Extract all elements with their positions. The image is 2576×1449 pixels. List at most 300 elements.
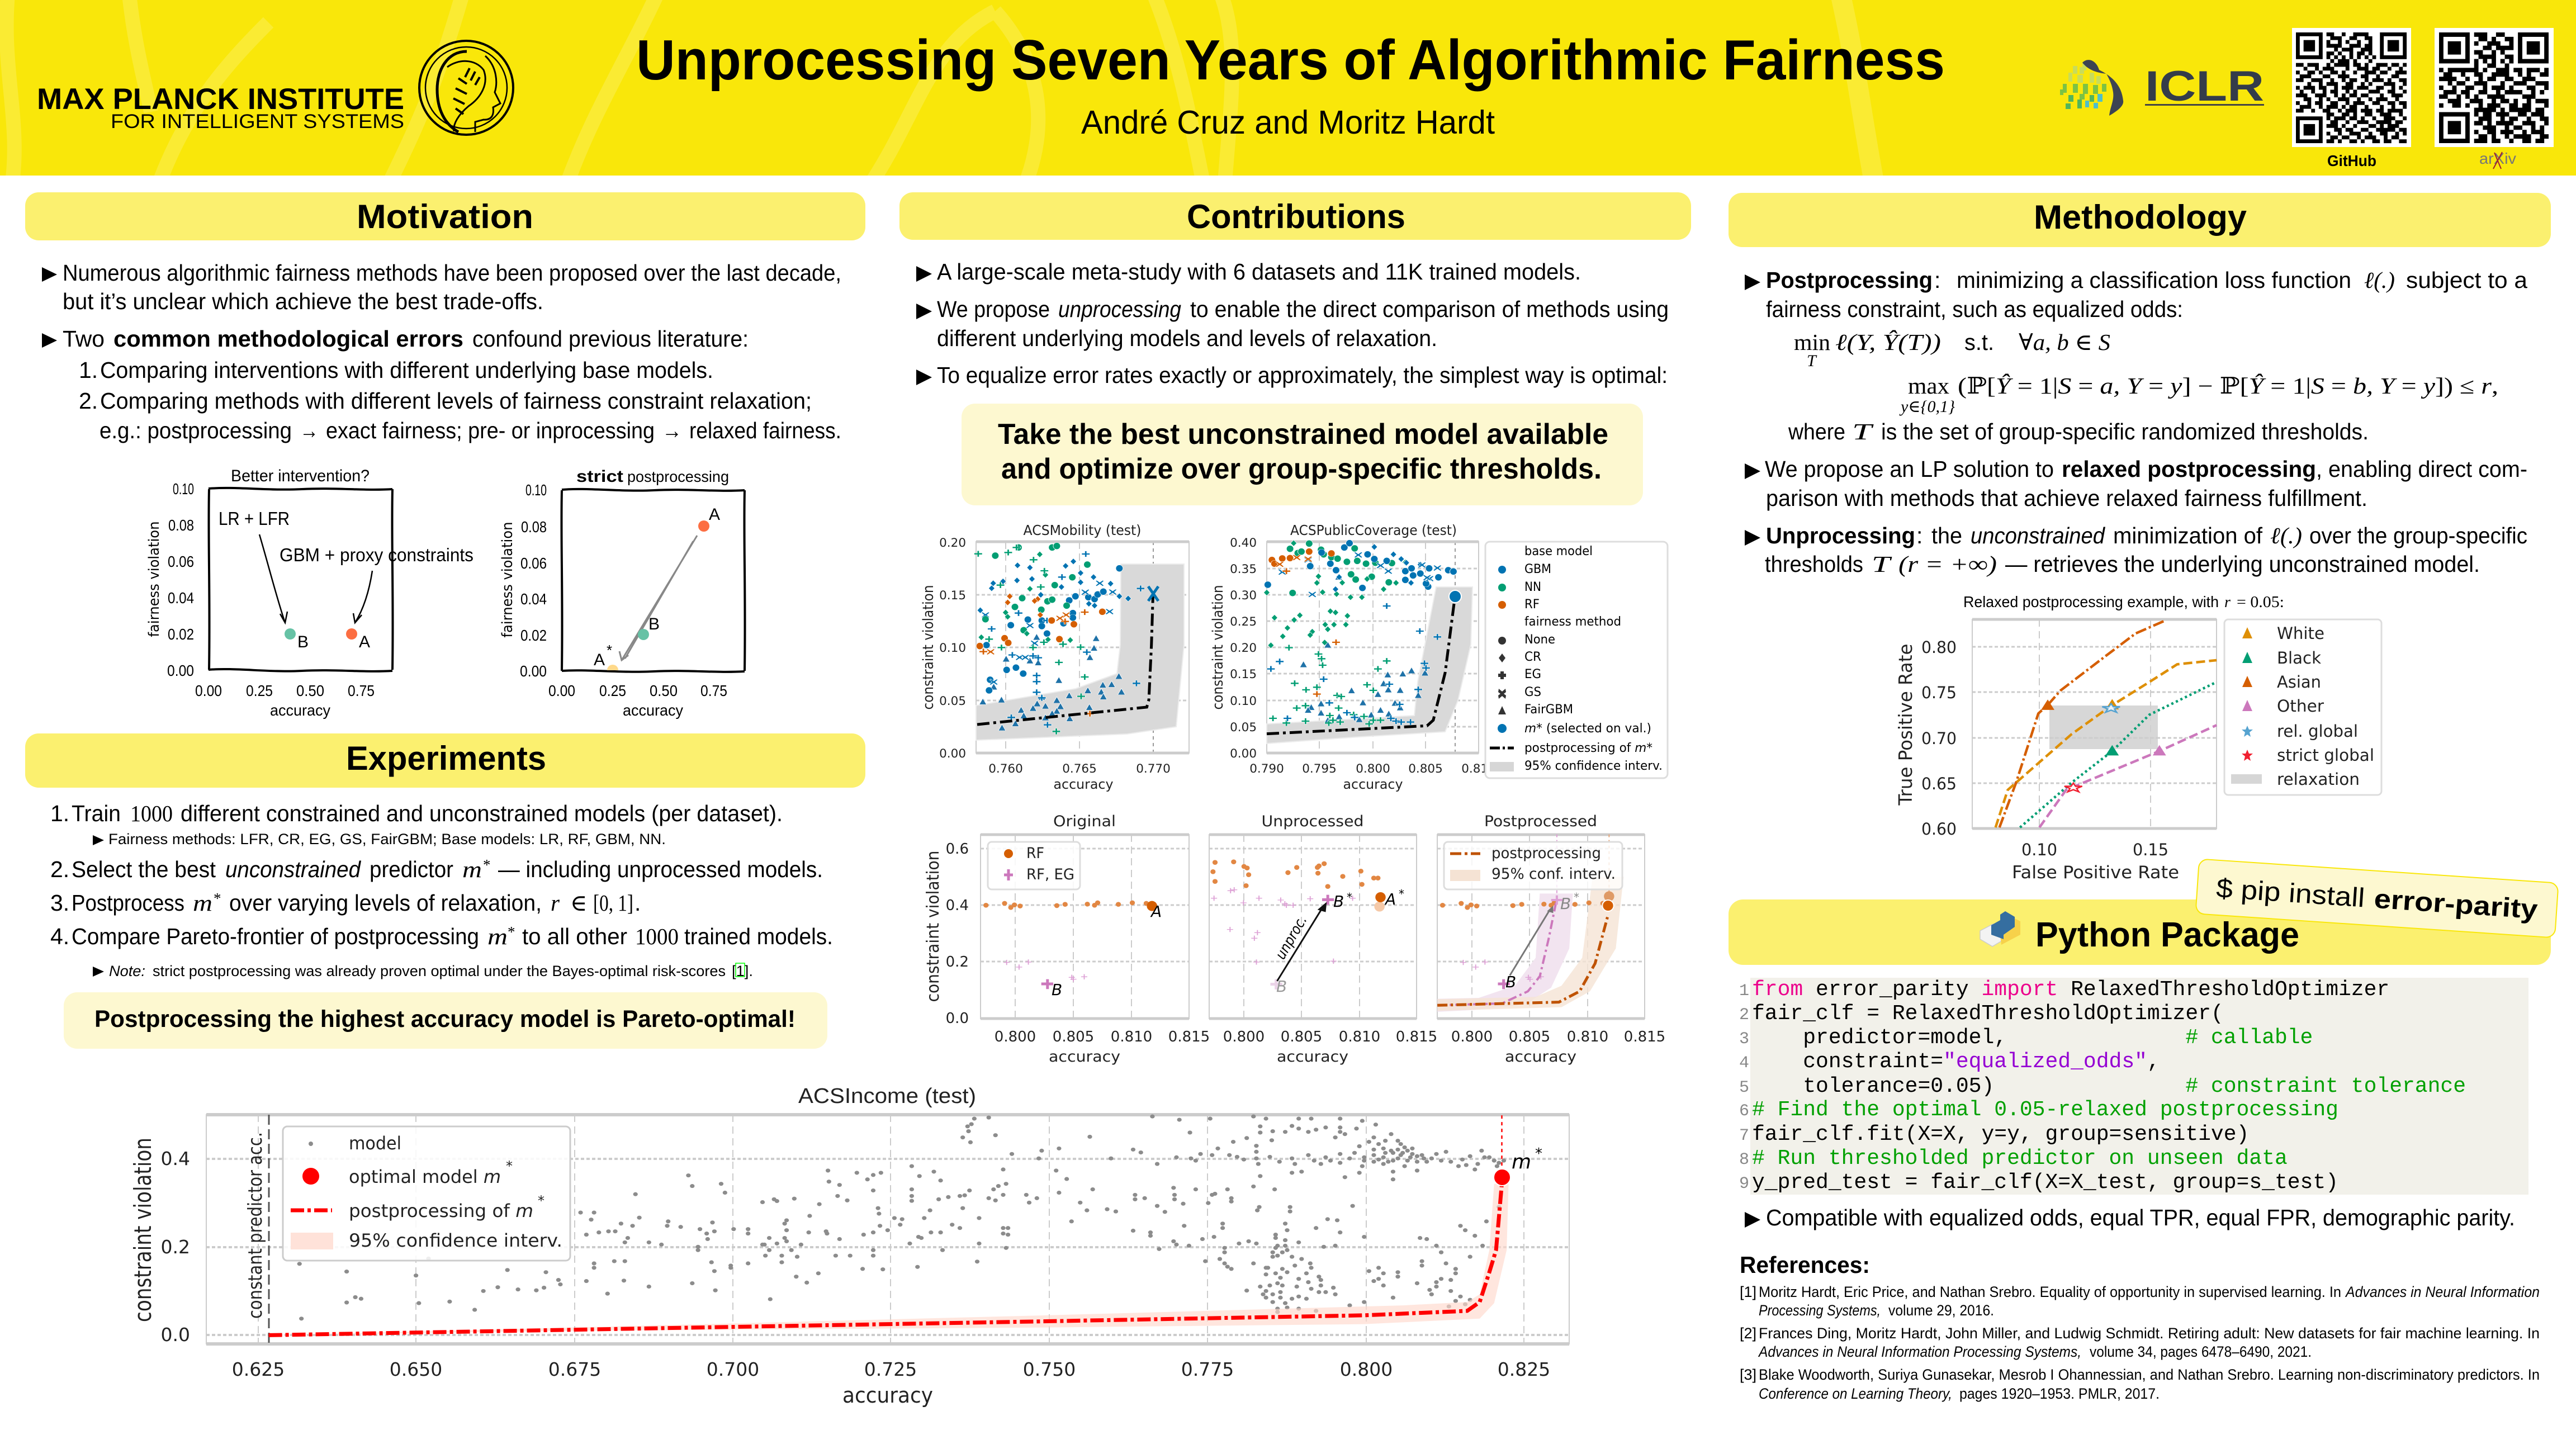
text: where T: where <box>1788 419 1845 444</box>
chart: better intervention sketch: 0.10 <box>173 480 194 498</box>
step 4: trained models. <box>684 924 833 949</box>
chart: ACSMobility: 0.05 <box>939 694 966 708</box>
bullet: unprocessing: (r = +∞) <box>1898 551 1997 577</box>
callout: Pareto-optimal: Postprocessing the highest accuracy model is Pareto-optimal! <box>94 1006 795 1033</box>
step 1: different constrained and unconstrained models (per dataset). <box>181 801 783 826</box>
step 2: * <box>483 856 491 873</box>
reference 2: volume 34, pages 6478–6490, 2021. <box>2090 1343 2312 1360</box>
chart: strict postprocessing sketch: B <box>648 615 660 633</box>
legend: groups: relaxation <box>2277 770 2360 789</box>
chart: ROC relaxed postprocessing: 0.80 <box>1921 638 1957 657</box>
legend: models and fairness methods: FairGBM <box>1524 703 1573 717</box>
chart: ACSMobility: 0.760 <box>988 762 1023 776</box>
chart: Postprocessed: * <box>1574 891 1579 904</box>
legend: ACSIncome: * <box>538 1193 544 1209</box>
chart: ACSIncome: 0.0 <box>161 1324 190 1346</box>
step 2: m <box>462 856 482 882</box>
chart: ACSMobility: constraint violation <box>920 585 937 710</box>
bullet: unprocessing: to enable the direct comparison of methods using <box>1190 296 1669 322</box>
chart: Unprocessed: unproc. <box>1272 913 1311 963</box>
sub-note: methods and base models: Fairness methods: LFR, CR, EG, GS, FairGBM; Base models: LR, RF, GBM, NN. <box>108 831 666 847</box>
chart: ACSMobility: 0.15 <box>939 589 966 603</box>
bullet: unprocessing: : <box>1916 523 1922 548</box>
chart: Original: A <box>1150 902 1162 921</box>
chart: better intervention sketch: 0.50 <box>296 682 324 699</box>
legend: groups: rel. global <box>2277 722 2358 741</box>
chart: ACSIncome: 0.2 <box>161 1236 190 1258</box>
legend: postprocessing: 95% conf. interv. <box>1491 865 1616 883</box>
step 4: to all other <box>522 924 627 949</box>
heading: Experiments <box>25 733 865 788</box>
chart: ACSIncome: 0.750 <box>1023 1358 1076 1380</box>
bullet: compatibility: Compatible with equalized odds, equal TPR, equal FPR, demographic parity. <box>1766 1205 2515 1230</box>
icon: Minerva seal <box>419 41 513 135</box>
step 3: ∈ <box>570 890 587 916</box>
legend: models and fairness methods: fairness method <box>1524 615 1621 629</box>
bullet: methodological errors: common methodological errors <box>113 326 463 352</box>
bullet: relaxed postprocessing: parison with methods that achieve relaxed fairness fulfillment. <box>1766 485 2367 511</box>
step 2: — including unprocessed models. <box>498 856 823 882</box>
chart: ACSMobility: 0.765 <box>1062 762 1097 776</box>
heading: Methodology: Methodology <box>2034 198 2247 236</box>
bullet: unprocessing: Unprocessing <box>1766 523 1915 548</box>
chart: ACSPublicCoverage: 0.40 <box>1230 536 1257 550</box>
chart: strict postprocessing sketch: 0.10 <box>525 481 547 499</box>
code block <box>1739 978 2528 1195</box>
legend: RF markers: RF <box>1026 845 1044 862</box>
step 3: 3. <box>50 890 69 916</box>
chart: ACSPublicCoverage: 0.05 <box>1230 721 1257 735</box>
chart: better intervention sketch: 0.00 <box>167 662 194 679</box>
chart: ACSPublicCoverage: 0.35 <box>1230 562 1257 576</box>
chart: Original: 0.800 <box>995 1029 1036 1045</box>
step 3: over varying levels of relaxation, <box>229 890 542 916</box>
chart: better intervention sketch: 0.25 <box>246 682 273 699</box>
bullet: numerous methods: Numerous algorithmic fairness methods have been proposed over the last decade, <box>63 260 841 286</box>
bullet: numerous methods: but it’s unclear which achieve the best trade-offs. <box>63 288 543 314</box>
chart: ACSMobility: accuracy <box>1053 776 1114 792</box>
bullet: methodological errors: → <box>300 418 319 443</box>
code block: fair_clf = RelaxedThresholdOptimizer( <box>1752 1002 2224 1026</box>
QR code: arXiv <box>2435 28 2554 169</box>
chart: ACSPublicCoverage: 0.795 <box>1302 762 1337 776</box>
legend: groups: Other <box>2277 697 2324 716</box>
chart: Original: 0.810 <box>1111 1029 1152 1045</box>
equation: constrained minimization: T <box>1807 352 1817 370</box>
chart: strict postprocessing sketch: 0.04 <box>520 590 547 608</box>
legend: ACSIncome: 95% confidence interv. <box>349 1230 562 1251</box>
reference 2: Advances in Neural Information Processing Systems, <box>1758 1343 2081 1360</box>
chart: Postprocessed: 0.800 <box>1451 1029 1493 1045</box>
legend: groups <box>2224 619 2381 795</box>
chart: Unprocessed: Unprocessed <box>1261 813 1364 830</box>
heading: Motivation: Motivation <box>357 198 533 235</box>
legend: models and fairness methods: GS <box>1524 685 1541 699</box>
equation: constrained minimization: max <box>1908 373 1949 399</box>
chart: Original: 0.6 <box>946 841 969 858</box>
step 2: 2. <box>50 856 69 882</box>
chart: strict postprocessing sketch: 0.00 <box>520 662 547 680</box>
chart: ACSPublicCoverage <box>1210 522 1496 792</box>
code block: 2 <box>1739 1006 1749 1025</box>
legend: ACSIncome: * <box>506 1158 513 1174</box>
bullet: methodological errors: Comparing methods with different levels of fairness constraint relaxation; <box>100 388 812 414</box>
chart: better intervention sketch: accuracy <box>270 702 330 719</box>
bullet: unprocessing: T <box>1872 551 1893 577</box>
step 3: . <box>634 890 641 916</box>
chart: strict postprocessing sketch: strict <box>576 467 623 486</box>
chart: Unprocessed: accuracy <box>1277 1048 1348 1066</box>
bullet: postprocessing: ℓ(.) <box>2364 267 2395 293</box>
code block: 4 <box>1739 1054 1749 1073</box>
chart: Postprocessed: 0.805 <box>1509 1029 1550 1045</box>
bullet: methodological errors: Two <box>63 326 105 352</box>
chart: strict postprocessing sketch: 0.08 <box>521 518 547 536</box>
chart: ROC relaxed postprocessing <box>1895 619 2381 883</box>
bullet: unprocessing: different underlying models and levels of relaxation. <box>937 325 1437 351</box>
chart: better intervention sketch: LR + LFR <box>219 508 290 529</box>
chart: ACSIncome: 0.4 <box>161 1148 190 1169</box>
chart: ACSIncome: 0.725 <box>864 1358 917 1380</box>
caption: relaxed example: Relaxed postprocessing example, with <box>1963 593 2219 610</box>
bullet: methodological errors: → <box>662 418 682 443</box>
code block: predictor=model, # callable <box>1752 1026 2313 1050</box>
reference 1 <box>1740 1284 2540 1319</box>
chart: strict postprocessing sketch: accuracy <box>623 702 683 719</box>
chart: Postprocessed: Postprocessed <box>1484 813 1597 830</box>
step 3: r <box>551 890 560 916</box>
bullet: equalize error rates: To equalize error rates exactly or approximately, the simplest way is optimal: <box>937 362 1668 388</box>
chart: Unprocessed: 0.810 <box>1339 1029 1380 1045</box>
equation: constrained minimization: ℓ(Y, Ŷ(T)) <box>1835 329 1941 355</box>
bullet: unprocessing: We propose <box>937 296 1050 322</box>
step 1: Train <box>72 801 121 826</box>
reference 1: [1] <box>1740 1284 1756 1300</box>
chart: ACSIncome: 0.650 <box>390 1358 442 1380</box>
callout: best unconstrained model <box>962 404 1643 505</box>
chart: better intervention sketch: 0.08 <box>168 517 194 534</box>
chart: ROC relaxed postprocessing: False Positive Rate <box>2012 863 2179 883</box>
legend: models and fairness methods: None <box>1524 633 1555 647</box>
chart: Postprocessed: B <box>1560 894 1571 913</box>
chart: Original: 0.805 <box>1053 1029 1094 1045</box>
chart: strict postprocessing sketch: A <box>709 505 720 524</box>
chart: ACSPublicCoverage: 0.800 <box>1356 762 1390 776</box>
chart: ROC relaxed postprocessing: 0.10 <box>2021 840 2057 859</box>
legend: postprocessing: postprocessing <box>1491 845 1601 862</box>
chart: strict postprocessing sketch: 0.06 <box>520 555 547 572</box>
step 4: Compare Pareto-frontier of postprocessing <box>72 924 479 949</box>
chart: Postprocessed <box>1437 813 1665 1066</box>
chart: strict postprocessing sketch: 0.02 <box>520 627 547 644</box>
chart: better intervention sketch: 0.02 <box>168 626 194 643</box>
icon: python logo <box>1980 911 2020 946</box>
chart: Original: accuracy <box>1049 1048 1120 1066</box>
sub-note: strict postprocessing: Note: <box>109 963 145 979</box>
chart: ACSIncome: 0.675 <box>548 1358 601 1380</box>
chart: ROC relaxed postprocessing: True Positive Rate <box>1895 644 1916 806</box>
legend: models and fairness methods: 95% confidence interv. <box>1524 759 1663 773</box>
chart: ACSMobility: 0.00 <box>939 747 966 761</box>
chart: better intervention sketch: GBM + proxy constraints <box>280 544 473 565</box>
legend: ACSIncome: model <box>349 1133 401 1154</box>
legend: ACSIncome: optimal model m <box>349 1166 501 1187</box>
step 2: unconstrained <box>225 856 361 882</box>
panel: Motivation <box>25 192 865 719</box>
chart: strict postprocessing sketch: 0.50 <box>650 682 678 699</box>
bullet: postprocessing: Postprocessing <box>1766 267 1933 293</box>
reference 3: Blake Woodworth, Suriya Gunasekar, Mesrob I Ohannessian, and Nathan Srebro. Learning non-discriminatory predictors. In <box>1759 1366 2540 1383</box>
reference 2: [2] <box>1740 1325 1756 1342</box>
legend: models and fairness methods: RF <box>1524 598 1540 612</box>
chart: ACSIncome: 0.775 <box>1181 1358 1234 1380</box>
bullet: unprocessing: — retrieves the underlying unconstrained model. <box>2005 551 2480 577</box>
chart: strict postprocessing sketch: 0.00 <box>548 682 575 699</box>
heading: Python Package: Python Package <box>2035 916 2299 954</box>
bullet: meta-study: A large-scale meta-study with 6 datasets and 11K trained models. <box>937 259 1581 285</box>
heading: Python Package <box>1729 899 2551 965</box>
QR code: arXiv: arXiv <box>2479 150 2516 167</box>
chart: better intervention sketch: Better intervention? <box>231 467 370 485</box>
chart: ACSMobility: 0.20 <box>939 536 966 550</box>
chart: better intervention sketch: 0.75 <box>348 682 375 699</box>
chart: ACSMobility: 0.10 <box>939 641 966 655</box>
bullet: methodological errors: e.g.: postprocessing <box>100 418 292 443</box>
chart: ACSIncome: 0.825 <box>1498 1358 1550 1380</box>
callout: best unconstrained model: Take the best unconstrained model available <box>998 418 1608 451</box>
bullet: unprocessing: thresholds <box>1765 551 1863 577</box>
legend: models and fairness methods: base model <box>1524 544 1593 558</box>
equation: constrained minimization <box>1794 329 2498 416</box>
bullet: relaxed postprocessing: We propose an LP solution to <box>1765 456 2054 482</box>
step 2: Select the best <box>72 856 216 882</box>
legend: groups: Asian <box>2277 673 2321 692</box>
code block: # Run thresholded predictor on unseen data <box>1752 1147 2288 1171</box>
chart: ROC relaxed postprocessing: 0.15 <box>2133 840 2168 859</box>
legend: models and fairness methods: EG <box>1524 667 1541 681</box>
QR code: GitHub: GitHub <box>2327 152 2376 169</box>
bullet: postprocessing: minimizing a classification loss function <box>1957 267 2351 293</box>
chart: Unprocessed: * <box>1399 887 1404 901</box>
code block: 9 <box>1739 1175 1749 1194</box>
bullet: methodological errors <box>42 326 841 443</box>
callout: best unconstrained model: and optimize over group-specific thresholds. <box>1001 453 1602 485</box>
chart: Unprocessed: A <box>1384 890 1396 908</box>
chart: ACSPublicCoverage: 0.25 <box>1230 615 1257 629</box>
chart: ACSIncome: 0.625 <box>232 1358 285 1380</box>
chart: Postprocessed: accuracy <box>1505 1048 1576 1066</box>
bullet: relaxed postprocessing: relaxed postprocessing <box>2062 456 2316 482</box>
legend: RF markers: RF, EG <box>1026 866 1074 883</box>
chart: ROC relaxed postprocessing: 0.75 <box>1921 683 1957 702</box>
step 4: m <box>487 924 508 949</box>
chart: ACSMobility: 0.770 <box>1136 762 1171 776</box>
chart: ACSIncome: accuracy <box>842 1383 933 1408</box>
panel: Contributions <box>899 192 1691 1066</box>
code block: # Find the optimal 0.05-relaxed postprocessing <box>1752 1098 2338 1122</box>
chart: strict postprocessing sketch: postprocessing <box>627 468 729 485</box>
bullet: relaxed postprocessing: , enabling direct com- <box>2316 456 2527 482</box>
bullet: methodological errors: exact fairness; pre- or inprocessing <box>326 418 655 443</box>
logo: Max Planck Institute: FOR INTELLIGENT SYSTEMS <box>111 111 404 132</box>
chart: ACSMobility <box>920 522 1189 792</box>
step 3 <box>50 890 641 916</box>
logo: ICLR <box>2060 60 2264 116</box>
bullet: unprocessing <box>1745 523 2527 577</box>
legend: models and fairness methods: postprocessing of m* <box>1524 741 1652 755</box>
heading: Contributions: Contributions <box>1187 198 1405 235</box>
code block: 7 <box>1739 1126 1749 1145</box>
legend: models and fairness methods: GBM <box>1524 562 1551 576</box>
chart: Original: 0.4 <box>946 897 969 914</box>
bullet: methodological errors: relaxed fairness. <box>689 418 841 443</box>
logo: Max Planck Institute: MAX PLANCK INSTITUTE <box>37 83 404 116</box>
step 4: * <box>508 924 515 940</box>
chart: strict postprocessing sketch: A <box>594 651 605 669</box>
bullet: unprocessing: the <box>1931 523 1962 548</box>
heading: Methodology <box>1729 193 2551 247</box>
chart: ACSPublicCoverage: ACSPublicCoverage (test) <box>1290 522 1457 538</box>
code block: 8 <box>1739 1150 1749 1169</box>
chart: strict postprocessing sketch: 0.75 <box>700 682 727 699</box>
bullet: methodological errors: 1. <box>79 357 98 383</box>
chart: ACSPublicCoverage: constraint violation <box>1210 585 1227 710</box>
step 3: Postprocess <box>72 890 184 916</box>
code block: y_pred_test = fair_clf(X=X_test, group=s_test) <box>1752 1171 2338 1195</box>
QR code: GitHub <box>2292 28 2411 169</box>
chart: ACSPublicCoverage: 0.00 <box>1230 747 1257 761</box>
chart: ACSIncome: ACSIncome (test) <box>798 1085 976 1108</box>
references <box>1740 1252 2540 1402</box>
legend: RF markers <box>988 842 1080 889</box>
step 2 <box>50 856 823 882</box>
bullet: methodological errors: confound previous literature: <box>472 326 749 352</box>
panel: Python Package <box>1729 859 2559 1230</box>
equation: constrained minimization: min <box>1794 329 1830 355</box>
reference 1: Moritz Hardt, Eric Price, and Nathan Srebro. Equality of opportunity in supervised learning. In <box>1759 1284 2341 1300</box>
reference 1: Processing Systems, <box>1759 1302 1881 1319</box>
chart: ACSMobility: ACSMobility (test) <box>1023 522 1142 538</box>
chart: strict postprocessing sketch: * <box>607 642 612 659</box>
panel: Methodology <box>1729 193 2551 883</box>
callout: pip install <box>2195 859 2559 938</box>
equation: constrained minimization: (ℙ[Ŷ = 1| S = a, Y = y] − ℙ[ Ŷ = 1| S = b, Y = y]) ≤ r, <box>1958 373 2498 399</box>
legend: models and fairness methods: m* (selected on val.) <box>1524 722 1651 736</box>
code block: constraint="equalized_odds", <box>1752 1050 2160 1074</box>
step 2: predictor <box>370 856 453 882</box>
chart: ACSPublicCoverage: accuracy <box>1343 776 1403 792</box>
reference 3: Conference on Learning Theory, <box>1759 1385 1952 1402</box>
equation: constrained minimization: s.t. <box>1964 329 1994 355</box>
step 3: [0, 1] <box>593 890 633 916</box>
step 1: 1. <box>50 801 69 826</box>
bullet: postprocessing <box>1745 267 2527 322</box>
chart: better intervention sketch: B <box>297 633 309 651</box>
legend: groups: strict global <box>2277 746 2374 765</box>
chart: ACSIncome: constant predictor acc. <box>244 1132 267 1319</box>
chart: Unprocessed: 0.805 <box>1281 1029 1322 1045</box>
step 3: m <box>193 890 212 916</box>
chart: better intervention sketch: 0.06 <box>168 553 194 570</box>
chart: strict postprocessing sketch: 0.25 <box>599 682 626 699</box>
legend: models and fairness methods: NN <box>1524 580 1541 594</box>
bullet: unprocessing: minimization of <box>2113 523 2263 548</box>
bullet: numerous methods <box>42 260 841 314</box>
text: where T: T <box>1852 419 1874 444</box>
callout: Pareto-optimal <box>64 992 827 1049</box>
chart: ACSPublicCoverage: 0.15 <box>1230 667 1257 681</box>
bullet: unprocessing: ℓ(.) <box>2270 523 2302 548</box>
chart: ACSPublicCoverage: 0.10 <box>1230 694 1257 708</box>
chart: Postprocessed: 0.815 <box>1624 1029 1665 1045</box>
code block: 5 <box>1739 1078 1749 1097</box>
chart: Original: 0.815 <box>1168 1029 1210 1045</box>
chart: ACSIncome: * <box>1535 1145 1542 1162</box>
callout: pip install: $ pip install <box>2215 874 2366 913</box>
caption: relaxed example: r <box>2224 594 2231 611</box>
code block: fair_clf.fit(X=X, y=y, group=sensitive) <box>1752 1123 2249 1147</box>
logo: ICLR: ICLR <box>2145 63 2264 110</box>
logo: Max Planck Institute <box>37 41 513 135</box>
chart: Unprocessed: * <box>1347 891 1352 904</box>
reference 1: volume 29, 2016. <box>1888 1302 1994 1319</box>
chart: ACSPublicCoverage: 0.30 <box>1230 589 1257 603</box>
chart: Unprocessed: 0.815 <box>1396 1029 1437 1045</box>
reference 2: Frances Ding, Moritz Hardt, John Miller, and Ludwig Schmidt. Retiring adult: New datasets for fair machine learning. In <box>1759 1325 2540 1342</box>
chart: better intervention sketch: A <box>359 633 370 651</box>
chart: strict postprocessing sketch: fairness violation <box>499 522 516 637</box>
chart: ACSPublicCoverage: 0.20 <box>1230 641 1257 655</box>
bullet: unprocessing: unconstrained <box>1971 523 2105 548</box>
icon: ICLR silhouette <box>2082 60 2123 116</box>
heading: Motivation <box>25 192 865 240</box>
legend: models and fairness methods: CR <box>1524 650 1541 664</box>
chart: ACSIncome <box>129 1085 1569 1408</box>
code block: from error_parity import RelaxedThresholdOptimizer <box>1752 978 2389 1002</box>
chart: Original: Original <box>1053 813 1116 830</box>
chart: better intervention sketch: 0.04 <box>168 589 194 607</box>
chart: better intervention sketch: fairness violation <box>146 521 163 637</box>
reference 3: [3] <box>1740 1366 1756 1383</box>
code block: 3 <box>1739 1030 1749 1049</box>
step 1: 1000 <box>130 801 173 826</box>
chart: Postprocessed: B <box>1505 973 1516 991</box>
bullet: methodological errors: 2. <box>79 388 98 414</box>
code block: tolerance=0.05) # constraint tolerance <box>1752 1074 2466 1098</box>
chart: Original: B <box>1052 981 1062 999</box>
header banner <box>0 0 2576 190</box>
chart: ACSPublicCoverage: 0.810 <box>1461 762 1496 776</box>
legend: models and fairness methods <box>1485 542 1668 778</box>
bullet: methodological errors: Comparing interventions with different underlying base models. <box>100 357 713 383</box>
chart: ACSPublicCoverage: 0.805 <box>1408 762 1443 776</box>
sub-note: strict postprocessing: strict postprocessing was already proven optimal under the Bayes-optimal risk-scores <box>153 963 726 979</box>
bullet: unprocessing: unprocessing <box>1058 296 1181 322</box>
chart: strict postprocessing sketch <box>499 467 745 719</box>
bullet: postprocessing: subject to a <box>2406 267 2527 293</box>
bullet: relaxed postprocessing <box>1745 456 2527 511</box>
step 3: * <box>214 890 221 907</box>
chart: Postprocessed: 0.810 <box>1567 1029 1608 1045</box>
code block: 1 <box>1739 982 1749 1001</box>
legend: groups: Black <box>2277 648 2321 667</box>
reference 3: pages 1920–1953. PMLR, 2017. <box>1959 1385 2160 1402</box>
chart: Unprocessed <box>1209 813 1437 1066</box>
chart: Unprocessed: B <box>1333 892 1344 911</box>
chart: Original: 0.0 <box>946 1010 969 1027</box>
heading: Contributions <box>899 192 1691 240</box>
step 4 <box>50 924 833 949</box>
